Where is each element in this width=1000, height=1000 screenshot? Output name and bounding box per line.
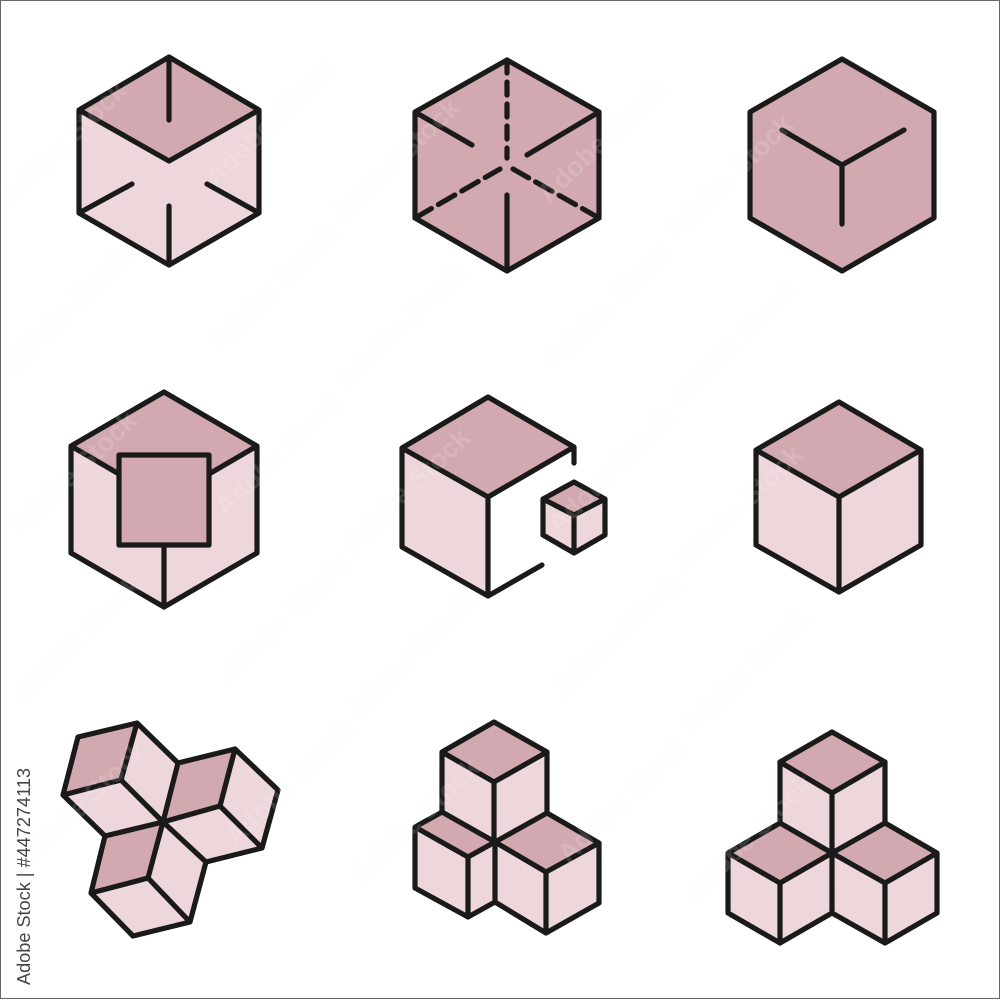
watermark pattern: Adobe Stock <box>0 240 138 377</box>
watermark pattern: Adobe Stock <box>326 92 466 229</box>
watermark pattern <box>0 55 819 906</box>
watermark pattern: Adobe Stock <box>674 604 814 741</box>
watermark pattern: Adobe Stock <box>532 72 672 209</box>
icon: plain isometric cube <box>756 402 921 592</box>
watermark pattern: Adobe Stock <box>552 732 692 869</box>
watermark pattern: Adobe Stock <box>336 422 476 559</box>
watermark pattern: Adobe Stock <box>204 220 344 357</box>
icon: hexagon with dashed interior edges <box>415 60 599 271</box>
watermark pattern: Adobe Stock <box>659 109 799 246</box>
icon: cube with front square <box>71 392 257 607</box>
watermark pattern: Adobe Stock <box>3 405 143 542</box>
icon: three stacked cubes, symmetric <box>728 732 937 943</box>
watermark pattern: Adobe Stock <box>199 55 339 192</box>
vertical stock credit: Adobe Stock | #447274113 <box>13 768 34 985</box>
watermark pattern: Adobe Stock <box>214 550 354 687</box>
watermark pattern: Adobe Stock <box>669 439 809 576</box>
watermark pattern: Adobe Stock <box>341 587 481 724</box>
watermark pattern: Adobe Stock <box>13 735 153 872</box>
watermark pattern: Adobe Stock <box>219 715 359 852</box>
icon: large open cube with small cube <box>402 397 605 596</box>
watermark pattern: Adobe Stock <box>209 385 349 522</box>
watermark pattern: Adobe Stock <box>8 570 148 707</box>
icon: three stacked cubes, left partly hidden <box>415 722 599 933</box>
icon: open cube with top face shaded and corner ticks <box>79 57 259 265</box>
watermark pattern: Adobe Stock <box>331 257 471 394</box>
watermark pattern: Adobe Stock <box>537 237 677 374</box>
watermark pattern: Adobe Stock <box>547 567 687 704</box>
watermark pattern: Adobe Stock <box>542 402 682 539</box>
icon: solid hexagon with Y lines <box>750 59 934 271</box>
watermark pattern: Adobe Stock <box>346 752 486 889</box>
watermark pattern: Adobe Stock <box>679 769 819 906</box>
icon: three tilted cubes <box>63 723 278 936</box>
icon: small cube <box>543 482 605 553</box>
watermark pattern: Adobe Stock <box>664 274 804 411</box>
